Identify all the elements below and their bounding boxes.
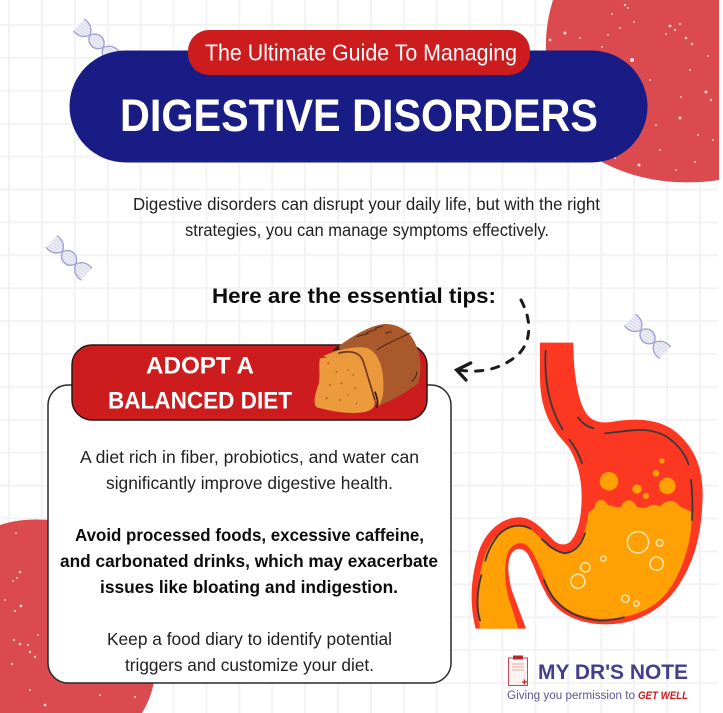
brand name: MY DR'S NOTE [538, 661, 688, 684]
card paragraph: avoid: and carbonated drinks, which may exacerbate [60, 551, 438, 571]
stomach acid [478, 500, 692, 629]
card paragraph: fiber: A diet rich in fiber, probiotics, and water can [80, 447, 419, 467]
icon: bread loaf [315, 324, 421, 413]
header text: ADOPT A [146, 352, 254, 380]
red blob: top right [546, 0, 719, 182]
red blob: bottom left [0, 520, 156, 713]
intro text: Digestive disorders can disrupt your daily life, but with the right [133, 194, 600, 214]
card paragraph: fiber: significantly improve digestive health. [106, 473, 393, 493]
subtitle pill [188, 30, 530, 75]
card paragraph: avoid: issues like bloating and indigestion. [100, 577, 398, 597]
arrow: dashed curve to card [457, 300, 529, 380]
stomach outline dashes [478, 351, 692, 621]
card paragraph: avoid: Avoid processed foods, excessive caffeine, [75, 525, 424, 545]
navy pill [70, 50, 648, 162]
card: balanced diet: BALANCED DIET [108, 388, 292, 414]
icon: dna strand top left [73, 19, 120, 64]
card body [48, 385, 451, 683]
stomach wall [472, 343, 703, 629]
card paragraph: avoid [60, 525, 438, 597]
card paragraph: food diary: Keep a food diary to identify potential [107, 629, 392, 649]
card paragraph: fiber [80, 447, 419, 493]
tagline: Giving you permission to [507, 690, 635, 702]
icon: clipboard [508, 656, 528, 686]
intro text: strategies, you can manage symptoms effectively. [185, 220, 549, 240]
card paragraph: food diary: triggers and customize your diet. [125, 655, 374, 675]
icon: dna strand left [46, 236, 92, 280]
icon: dna strand right [624, 314, 671, 359]
card paragraph: food diary [107, 629, 392, 675]
title banner [70, 30, 648, 162]
card header [72, 345, 427, 420]
tagline emphasis: GET WELL [638, 690, 688, 702]
illustration: stomach [472, 343, 703, 629]
logo: my dr's note [507, 656, 688, 702]
card: balanced diet [48, 324, 451, 683]
intro text [133, 194, 600, 240]
heading: essential tips: Here are the essential tips: [212, 284, 496, 308]
rising bubbles [600, 458, 676, 499]
main title: DIGESTIVE DISORDERS [120, 90, 598, 141]
acid bubbles [571, 532, 663, 606]
subtitle text: The Ultimate Guide To Managing [205, 40, 517, 66]
